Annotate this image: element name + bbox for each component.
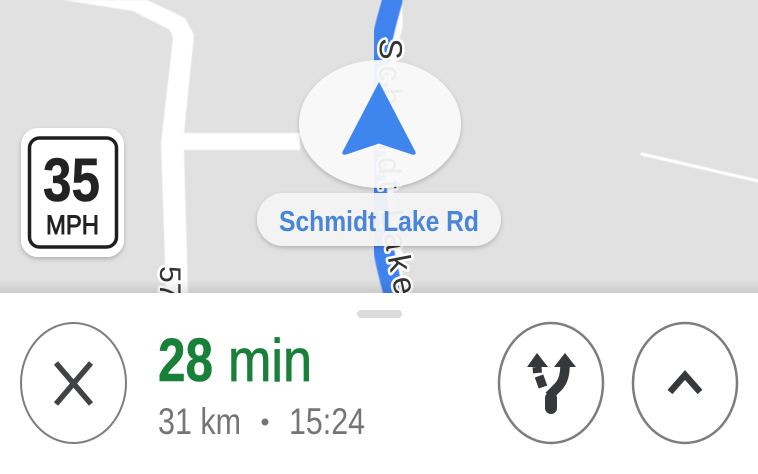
road name on route: Schmidt Lake	[376, 37, 414, 293]
position halo	[299, 60, 461, 188]
route options button	[499, 323, 603, 443]
trip distance and arrival time: 31 km	[158, 401, 241, 442]
sheet shadow	[0, 280, 758, 293]
map background	[0, 0, 758, 294]
current street label	[257, 193, 501, 246]
cross street label: 57	[153, 266, 186, 299]
speed limit sign	[21, 128, 124, 257]
main route	[376, 0, 401, 300]
ETA duration	[158, 326, 312, 394]
trip distance and arrival time	[158, 401, 365, 442]
current street label: Schmidt Lake Rd	[279, 206, 479, 238]
icon: navigation arrow	[343, 83, 415, 154]
close button	[21, 323, 126, 443]
side roads	[63, 0, 758, 294]
ETA duration: 28	[158, 326, 213, 394]
speed limit sign: 35	[43, 146, 100, 214]
speed limit sign: MPH	[46, 210, 99, 240]
drag handle	[357, 310, 402, 318]
ETA duration: min	[228, 327, 312, 394]
trip distance and arrival time: 15:24	[289, 401, 365, 442]
bottom sheet	[0, 293, 758, 474]
expand button	[633, 323, 737, 443]
